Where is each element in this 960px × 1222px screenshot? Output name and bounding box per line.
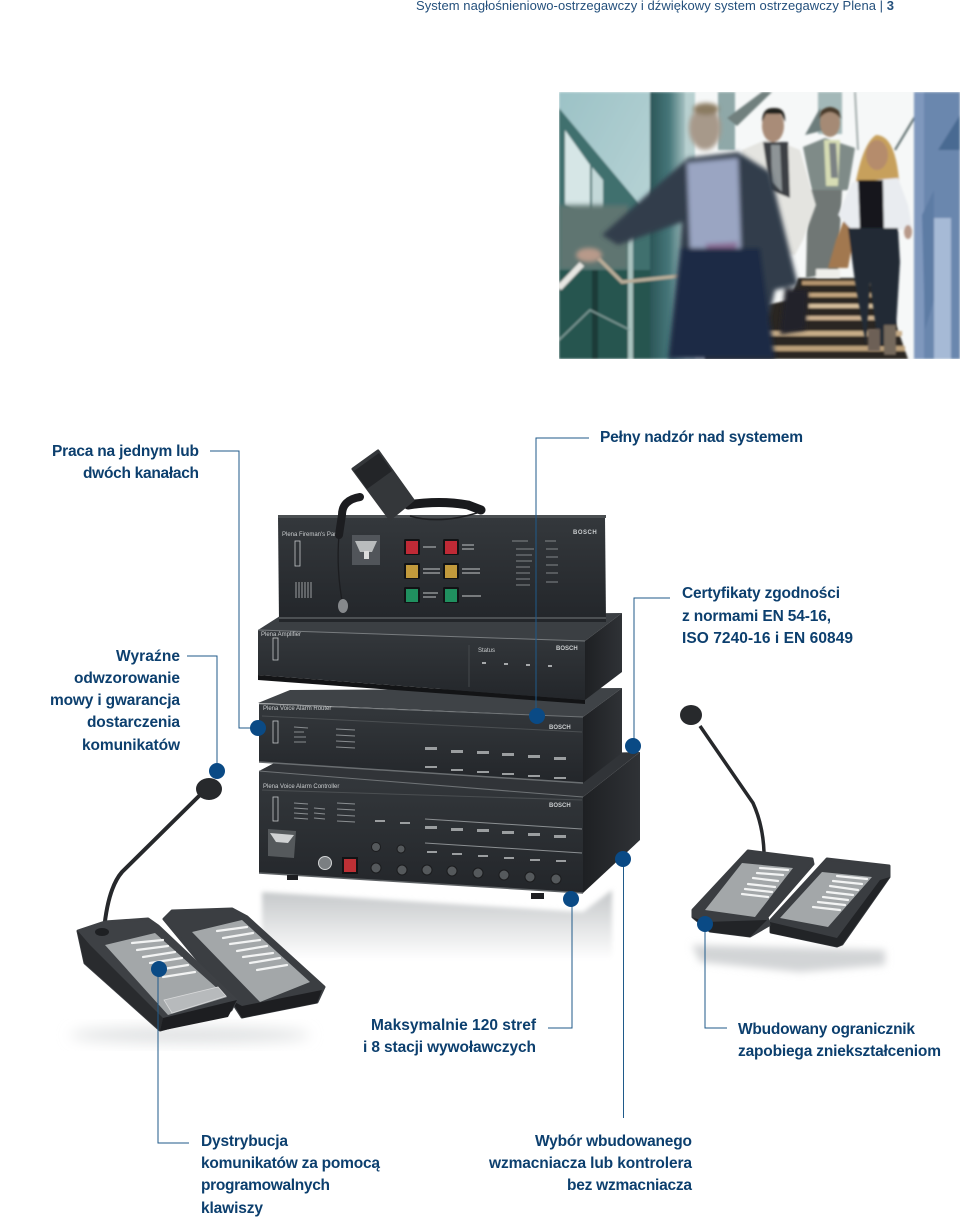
label: built-in limiter [738, 1021, 941, 1060]
label: amplifier or controller: wzmacniacza lub kontrolera [488, 1155, 692, 1172]
equipment: fireman's panel [278, 515, 606, 622]
leader: built-in limiter [697, 916, 727, 1028]
person: blurred man in front [576, 103, 808, 359]
person: man in white coat [742, 108, 816, 255]
equipment: amplifier: BOSCH [556, 646, 578, 652]
equipment: amplifier [258, 613, 622, 704]
keypad extension [164, 909, 324, 1018]
photo: people walking down stairs [559, 92, 960, 359]
leader: single or dual channel [210, 451, 266, 736]
shadow under right call stations [692, 945, 885, 972]
call station with microphone, left [77, 778, 324, 1031]
label: full supervision: Pełny nadzór nad systemem [600, 429, 803, 446]
label: amplifier or controller [488, 1133, 692, 1194]
label: certificates: z normami EN 54-16, [682, 608, 831, 625]
label: zones and stations: Maksymalnie 120 stref [371, 1017, 537, 1034]
label: amplifier or controller: Wybór wbudowanego [535, 1133, 692, 1150]
label: single or dual channel: Praca na jednym lub [52, 443, 199, 460]
equipment: voice alarm controller: Plena Voice Alarm Controller [263, 784, 339, 790]
equipment: hand microphone [338, 451, 481, 613]
call station base [692, 851, 813, 937]
label: built-in limiter: Wbudowany ogranicznik [738, 1021, 915, 1038]
leader: certificates [625, 598, 670, 754]
equipment: voice alarm router: Plena Voice Alarm Router [263, 706, 331, 712]
leader: clear speech [187, 656, 225, 779]
leader: zones and stations [548, 891, 579, 1028]
label: clear speech: mowy i gwarancja [50, 692, 180, 709]
label: single or dual channel [52, 443, 199, 482]
emergency buttons [404, 539, 481, 603]
label: programmable keys [201, 1133, 380, 1217]
label: zones and stations: i 8 stacji wywoławczych [363, 1039, 536, 1056]
equipment: fireman's panel: BOSCH [573, 530, 597, 536]
call station with microphone, right [680, 705, 890, 947]
gooseneck microphone [104, 778, 222, 930]
label: certificates [682, 585, 853, 647]
label: clear speech: komunikatów [82, 737, 181, 754]
label: programmable keys: Dystrybucja [201, 1133, 288, 1150]
leader: full supervision [529, 438, 589, 724]
equipment: voice alarm router [258, 688, 622, 783]
label: clear speech [50, 648, 181, 754]
person: man in grey suit [803, 107, 855, 278]
equipment: voice alarm controller [259, 752, 640, 899]
label: clear speech: dostarczenia [87, 714, 180, 731]
stairs [703, 278, 908, 359]
shadow under left call stations [70, 1027, 310, 1043]
person: blonde woman [828, 135, 912, 355]
equipment: voice alarm controller: BOSCH [549, 803, 571, 809]
label: single or dual channel: dwóch kanałach [83, 465, 199, 482]
reflection under equipment rack [262, 890, 612, 960]
label: amplifier or controller: bez wzmacniacza [567, 1177, 692, 1194]
call station base [77, 919, 237, 1031]
label: certificates: Certyfikaty zgodności [682, 585, 840, 602]
equipment: fireman's panel: Plena Fireman's Panel [282, 532, 342, 538]
label: certificates: ISO 7240-16 i EN 60849 [682, 630, 853, 647]
keypad extension [770, 859, 890, 947]
knobs [371, 842, 561, 884]
equipment: voice alarm router: BOSCH [549, 725, 571, 731]
label: programmable keys: komunikatów za pomocą [201, 1155, 380, 1172]
label: clear speech: odwzorowanie [74, 670, 180, 687]
leader: amplifier or controller [615, 851, 631, 1118]
label: programmable keys: klawiszy [201, 1200, 263, 1217]
gooseneck microphone [680, 705, 764, 852]
label: built-in limiter: zapobiega zniekształceniom [738, 1043, 941, 1060]
label: programmable keys: programowalnych [201, 1177, 330, 1194]
equipment: amplifier: Plena Amplifier [261, 632, 301, 638]
label: zones and stations [363, 1017, 537, 1056]
label: clear speech: Wyraźne [116, 648, 180, 665]
leader: programmable keys [151, 961, 189, 1143]
equipment: amplifier: Status [478, 648, 495, 654]
